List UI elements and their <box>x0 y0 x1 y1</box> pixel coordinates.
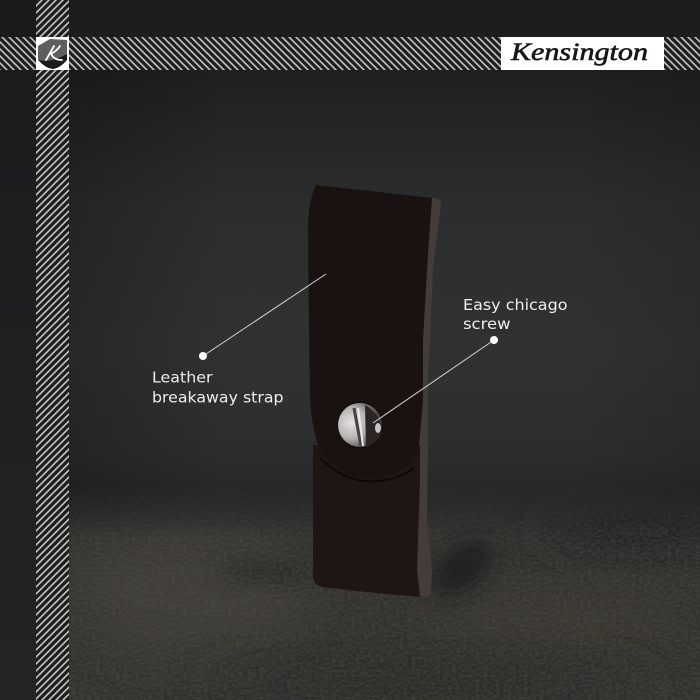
callout: easy chicago screw <box>373 296 572 423</box>
logo: Kensington wordmark: Kensington <box>510 39 648 66</box>
leather strap product <box>308 185 441 597</box>
logo: Kensington wordmark <box>501 37 664 70</box>
background: studio wall and concrete floor <box>69 118 700 700</box>
label: screw <box>463 315 510 333</box>
chicago screw head <box>337 402 383 448</box>
strap upper section and flap <box>308 185 432 478</box>
label: Easy chicago <box>463 296 568 314</box>
leader line <box>203 274 326 356</box>
callout: leather breakaway strap <box>152 274 326 406</box>
label: Leather <box>152 368 213 386</box>
flap shadow line <box>320 458 414 481</box>
strap lower section <box>313 445 420 597</box>
strap cut edge <box>416 198 441 597</box>
marker dot <box>199 352 207 360</box>
label: breakaway strap <box>152 388 284 406</box>
icon: K shield logo <box>36 37 69 70</box>
leader line <box>373 340 494 423</box>
marker dot <box>490 336 498 344</box>
